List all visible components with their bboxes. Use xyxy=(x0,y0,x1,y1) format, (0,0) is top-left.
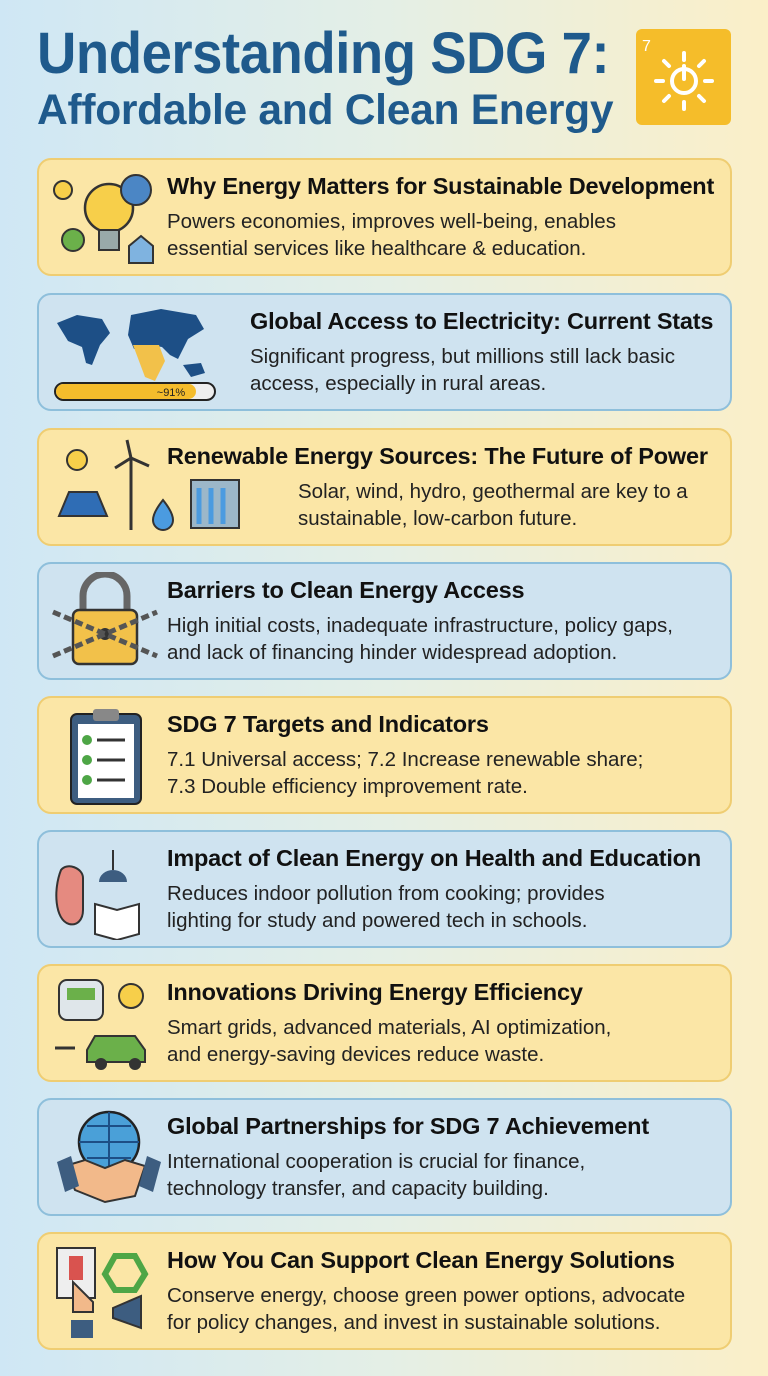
icon: switch, recycle, megaphone xyxy=(56,1247,148,1338)
icon: lungs, lamp, book xyxy=(55,850,140,940)
panel: renewable energy: sustainable, low-carbon future. xyxy=(298,507,577,530)
text: targets: SDG 7 Targets and Indicators xyxy=(167,711,489,737)
panel: how you can support xyxy=(37,1232,732,1350)
icon: world map with progress bar: ~91% xyxy=(157,387,185,399)
icon: smart meter, bulb, electric car xyxy=(55,979,146,1070)
icon: padlock with chains xyxy=(52,572,158,666)
icon: globe handshake xyxy=(57,1110,161,1203)
text: partnerships: technology transfer, and capacity building. xyxy=(167,1177,549,1200)
icon: clipboard checklist xyxy=(70,709,142,805)
text: why energy matters: essential services like healthcare & education. xyxy=(167,237,586,260)
icon: SDG 7 badge: 7 xyxy=(642,38,651,55)
title: Affordable and Clean Energy xyxy=(37,86,613,134)
icon: SDG 7 badge xyxy=(636,29,731,125)
text: innovations xyxy=(167,979,611,1066)
title: Understanding SDG 7: xyxy=(37,21,609,86)
panel: innovations xyxy=(37,964,732,1082)
text: barriers xyxy=(167,577,673,664)
panel: partnerships xyxy=(37,1098,732,1216)
icon: bulb and gears xyxy=(53,174,154,264)
text: why energy matters xyxy=(167,173,714,260)
text: innovations: and energy-saving devices reduce waste. xyxy=(167,1043,544,1066)
text: partnerships xyxy=(167,1113,649,1200)
text: how you can support: How You Can Support Clean Energy Solutions xyxy=(167,1247,675,1273)
panel: targets xyxy=(37,696,732,814)
text: health and education: lighting for study and powered tech in schools. xyxy=(167,909,588,932)
text: innovations: Smart grids, advanced materials, AI optimization, xyxy=(167,1016,611,1039)
text: global access xyxy=(250,308,713,395)
text: how you can support: Conserve energy, choose green power options, advocate xyxy=(167,1284,685,1307)
panel: renewable energy: Solar, wind, hydro, geothermal are key to a xyxy=(298,480,688,503)
panel: renewable energy xyxy=(37,428,732,546)
text: partnerships: Global Partnerships for SDG 7 Achievement xyxy=(167,1113,649,1139)
text: renewable energy: Renewable Energy Sources: The Future of Power xyxy=(167,443,708,469)
text: barriers: and lack of financing hinder widespread adoption. xyxy=(167,641,617,664)
text: barriers: High initial costs, inadequate infrastructure, policy gaps, xyxy=(167,614,673,637)
text: barriers: Barriers to Clean Energy Access xyxy=(167,577,524,603)
panel: why energy matters xyxy=(37,158,732,276)
text: targets: 7.3 Double efficiency improvement rate. xyxy=(167,775,528,798)
text: partnerships: International cooperation is crucial for finance, xyxy=(167,1150,585,1173)
text: innovations: Innovations Driving Energy Efficiency xyxy=(167,979,583,1005)
icon: world map with progress bar xyxy=(54,309,216,401)
text: why energy matters: Powers economies, improves well-being, enables xyxy=(167,210,616,233)
text: global access: access, especially in rural areas. xyxy=(250,372,546,395)
text: how you can support: for policy changes, and invest in sustainable solutions. xyxy=(167,1311,660,1334)
text: targets xyxy=(167,711,643,798)
text: health and education xyxy=(167,845,701,932)
text: targets: 7.1 Universal access; 7.2 Increase renewable share; xyxy=(167,748,643,771)
icon: solar, wind, hydro xyxy=(58,440,240,531)
text: global access: Global Access to Electricity: Current Stats xyxy=(250,308,713,334)
text: health and education: Reduces indoor pollution from cooking; provides xyxy=(167,882,605,905)
text: health and education: Impact of Clean Energy on Health and Education xyxy=(167,845,701,871)
panel: health and education xyxy=(37,830,732,948)
panel: global access xyxy=(37,293,732,411)
text: why energy matters: Why Energy Matters for Sustainable Development xyxy=(167,173,714,199)
panel: barriers xyxy=(37,562,732,680)
text: global access: Significant progress, but millions still lack basic xyxy=(250,345,675,368)
text: how you can support xyxy=(167,1247,685,1334)
title xyxy=(37,21,614,134)
